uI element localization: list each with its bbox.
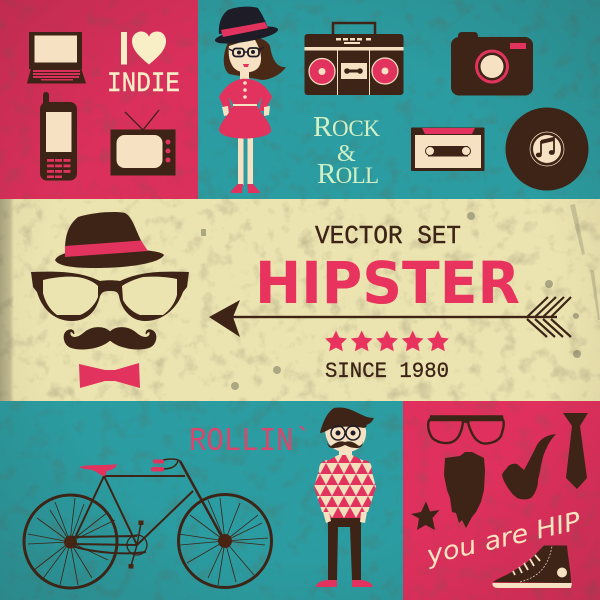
icon: star (411, 502, 440, 530)
icon: boombox (304, 23, 404, 95)
icon: sneaker (492, 546, 572, 588)
text: Rock and Roll: & (337, 141, 356, 167)
illustration: bicycle (24, 459, 272, 588)
icon: aviator glasses (428, 416, 504, 443)
icon: laptop (27, 32, 86, 84)
illustration: glasses (31, 272, 189, 321)
text: Rock and Roll: ROLL (317, 158, 379, 190)
icon: cassette tape (411, 128, 484, 171)
text: Vector Set: VECTOR SET (315, 221, 461, 251)
panel: central cream banner (0, 199, 600, 401)
icon: vinyl record (506, 108, 588, 190)
heading: I love Indie (107, 32, 180, 100)
heading: I love Indie: INDIE (107, 69, 180, 100)
text: you are HIP: you are HIP (423, 506, 584, 570)
icon: mobile phone (40, 92, 77, 180)
icon: smoking pipe (502, 434, 556, 499)
figure: hipster girl (214, 7, 286, 193)
text: Since 1980: SINCE 1980 (325, 359, 449, 384)
rating stars (325, 330, 449, 351)
icon: television (110, 110, 176, 176)
text: Rock and Roll (313, 111, 380, 190)
panel: bottom left teal (0, 401, 403, 600)
title: Hipster: HIPSTER (255, 250, 520, 317)
illustration: bow tie (79, 363, 140, 388)
icon: beard (444, 452, 485, 528)
text: Rock and Roll: ROCK (313, 111, 380, 143)
icon: camera (451, 32, 533, 96)
panel: top left pink (0, 0, 198, 199)
icon: necktie (563, 413, 588, 489)
illustration: moustache (64, 328, 156, 349)
figure: hipster man (314, 407, 376, 587)
text: Rollin: ROLLIN` (189, 423, 311, 460)
illustration: hat (55, 212, 164, 268)
panel: top right teal (198, 0, 600, 199)
panel: bottom right pink (403, 401, 600, 600)
arrow: long arrow pointing left (209, 297, 571, 337)
